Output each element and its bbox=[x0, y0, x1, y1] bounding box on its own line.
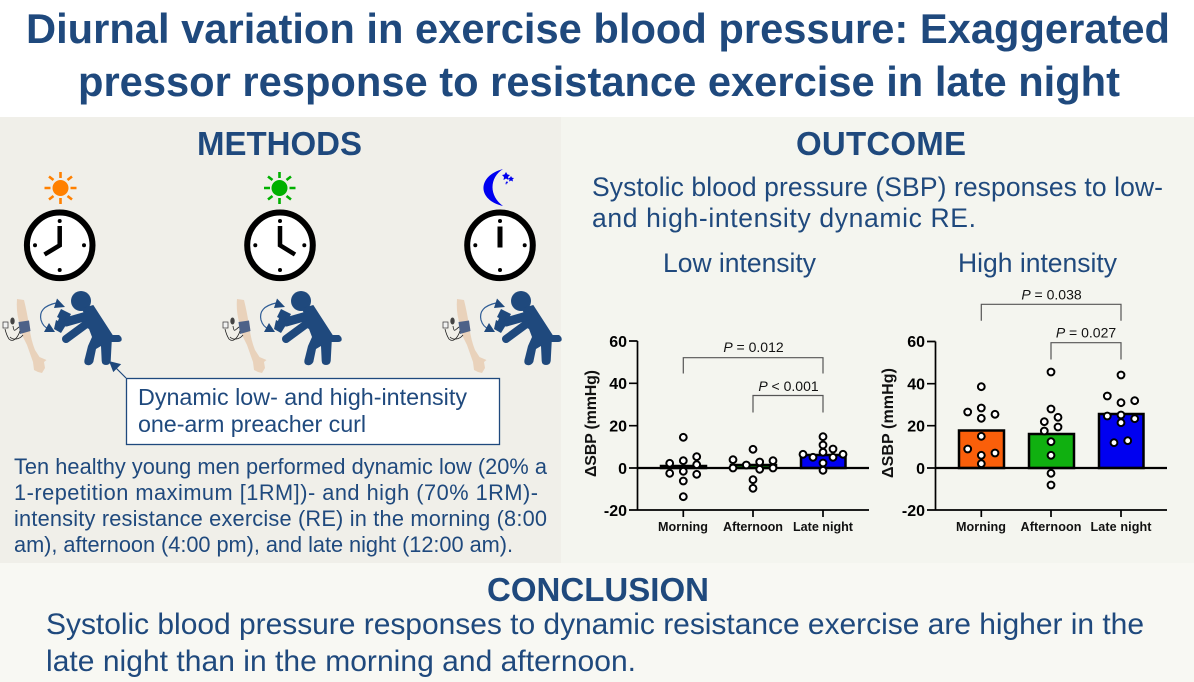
heading: methods: METHODS bbox=[197, 125, 362, 162]
y tick labels: 40 bbox=[907, 376, 925, 394]
y tick labels: -20 bbox=[604, 503, 627, 520]
text block: methods description: 1-repetition maximum [1RM])- and high (70% 1RM)- bbox=[14, 480, 538, 505]
bars bbox=[661, 455, 846, 468]
y tick labels: 0 bbox=[916, 461, 925, 478]
y tick labels bbox=[902, 334, 925, 520]
data points bbox=[964, 369, 1138, 488]
category labels: Morning bbox=[956, 520, 1006, 534]
title bbox=[26, 5, 1170, 105]
y axis label: ΔSBP (mmHg) bbox=[583, 370, 600, 477]
axes bbox=[629, 341, 869, 517]
category labels: Afternoon bbox=[1020, 520, 1082, 534]
y axis label: ΔSBP (mmHg) bbox=[880, 368, 897, 478]
significance: afternoon vs late night: P = 0.027 bbox=[1056, 324, 1116, 340]
y tick labels: 60 bbox=[609, 334, 627, 351]
significance: morning vs late night: P = 0.012 bbox=[723, 339, 784, 355]
callout bbox=[126, 378, 500, 444]
icon: arm with cuff, morning bbox=[3, 299, 46, 373]
significance: afternoon vs late night bbox=[1051, 324, 1121, 360]
icon: person curling, afternoon bbox=[261, 291, 342, 365]
y tick labels: -20 bbox=[902, 503, 925, 520]
data points bbox=[666, 433, 846, 500]
icon: person curling, morning bbox=[41, 291, 122, 365]
y tick labels: 0 bbox=[618, 461, 627, 478]
text block: methods description: am), afternoon (4:00 pm), and late night (12:00 am). bbox=[14, 532, 513, 557]
text block: methods description: intensity resistance exercise (RE) in the morning (8:00 bbox=[14, 506, 547, 531]
icon: morning clock bbox=[27, 212, 92, 278]
heading: conclusion: CONCLUSION bbox=[487, 571, 709, 608]
axes bbox=[927, 342, 1167, 517]
icon: morning sun bbox=[44, 172, 76, 204]
bars bbox=[959, 414, 1144, 468]
chart: high intensity bbox=[880, 286, 1167, 534]
text block: outcome description: and high-intensity dynamic RE. bbox=[592, 203, 976, 233]
text block: outcome description bbox=[592, 172, 1163, 233]
significance: morning vs late night: P = 0.038 bbox=[1021, 286, 1082, 302]
text block: methods description: Ten healthy young men performed dynamic low (20% a bbox=[14, 454, 548, 479]
text block: methods description bbox=[14, 454, 548, 557]
significance: afternoon vs late night: P < 0.001 bbox=[758, 378, 819, 394]
significance: morning vs late night bbox=[683, 339, 823, 374]
y tick labels: 40 bbox=[609, 376, 627, 393]
category labels: Late night bbox=[1090, 520, 1152, 534]
chart: low intensity bbox=[583, 334, 869, 534]
panel: methods bbox=[0, 117, 561, 563]
category labels bbox=[956, 520, 1152, 534]
category labels: Late night bbox=[793, 520, 854, 534]
title: pressor response to resistance exercise in late night bbox=[78, 58, 1120, 105]
heading: low intensity: Low intensity bbox=[663, 248, 817, 278]
category labels bbox=[658, 520, 854, 534]
icon: afternoon sun bbox=[264, 172, 296, 204]
icon: arm with cuff, late night bbox=[443, 299, 486, 373]
category labels: Afternoon bbox=[723, 520, 783, 534]
icon: late night clock bbox=[467, 212, 533, 278]
significance: morning vs late night bbox=[981, 286, 1121, 321]
heading: high intensity: High intensity bbox=[958, 248, 1118, 278]
significance: afternoon vs late night bbox=[753, 378, 823, 412]
y tick labels: 60 bbox=[907, 334, 925, 351]
text block: conclusion: Systolic blood pressure responses to dynamic resistance exercise are higher in the bbox=[46, 608, 1144, 641]
arrow: callout pointer bbox=[110, 362, 126, 378]
icon: arm with cuff, afternoon bbox=[223, 299, 266, 373]
panel: conclusion bbox=[0, 563, 1194, 682]
category labels: Morning bbox=[658, 520, 708, 534]
title: Diurnal variation in exercise blood pressure: Exaggerated bbox=[26, 5, 1170, 52]
y tick labels: 20 bbox=[907, 418, 925, 436]
callout: Dynamic low- and high-intensity bbox=[138, 384, 467, 410]
callout: one-arm preacher curl bbox=[138, 411, 366, 437]
icon: person curling, late night bbox=[481, 291, 562, 365]
panel: outcome bbox=[561, 117, 1194, 563]
text block: conclusion bbox=[46, 608, 1144, 678]
heading: outcome: OUTCOME bbox=[796, 125, 966, 162]
y tick labels: 20 bbox=[609, 418, 627, 436]
icon: moon and stars bbox=[484, 169, 514, 206]
text block: conclusion: late night than in the morning and afternoon. bbox=[46, 645, 636, 678]
y tick labels bbox=[604, 334, 627, 520]
text block: outcome description: Systolic blood pressure (SBP) responses to low- bbox=[592, 172, 1163, 202]
icon: afternoon clock bbox=[247, 212, 313, 278]
